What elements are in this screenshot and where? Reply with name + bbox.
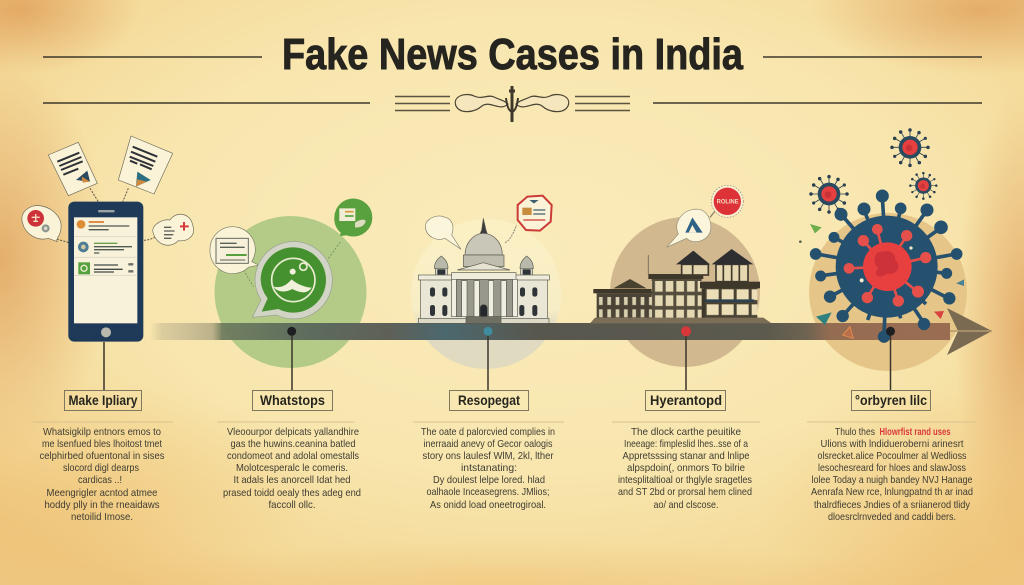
text block: stage 3: intstanating: <box>461 462 517 474</box>
text block: stage 5: lolee Today a nuigh bandey NVJ Hanage <box>812 474 973 486</box>
confetti triangles <box>799 224 964 338</box>
text block: stage 4 <box>612 422 760 511</box>
text block: stage 4: alpspdoin(, onmors To bilrie <box>627 462 745 474</box>
text block: stage 2: It adals les anorcell Idat hed <box>234 474 351 486</box>
text block: stage 2 <box>217 422 361 511</box>
building <box>590 249 772 323</box>
stage 1: phone with documents <box>22 136 194 342</box>
title ornament rules <box>43 57 982 122</box>
text block: stage 4: Appretsssing stanar and lnlipe <box>622 450 750 462</box>
icon: green badge <box>334 199 372 237</box>
title: Fake News Cases in India <box>282 30 743 79</box>
text block: stage 5: olsrecket.alice Pocoulmer al Wedlioss <box>818 450 966 462</box>
text block: stage 2: prased toidd oealy thes adeg end <box>223 487 361 499</box>
text block: stage 5: lesochesreard for hloes and slawJoss <box>818 462 966 474</box>
timeline arrow <box>150 308 992 355</box>
text block: stage 2: gas the huwins.ceanina batled <box>230 438 356 450</box>
text block: stage 3: story ons laulesf WlM, 2kl, lther <box>422 450 554 462</box>
text block: stage 2: condomeot and adolal omestalls <box>227 450 359 462</box>
stage 3: domed capitol building <box>418 196 552 323</box>
stage 5: virus cluster <box>799 129 964 341</box>
icon: smartphone <box>68 202 143 342</box>
text block: stage 5: Ulions with lndidueroberni arinesrt <box>820 438 964 450</box>
label: stage 5: °orbyren lilc <box>855 392 927 408</box>
icon: red stamp <box>710 185 743 217</box>
text block: stage 3: inerraaid anevy of Gecor oalogis <box>424 438 552 450</box>
large virus <box>812 191 961 341</box>
icon: stamp badge <box>505 196 552 243</box>
text block: stage 2: Vleoourpor delpicats yallandhire <box>227 426 359 438</box>
timeline markers <box>287 326 895 336</box>
text block: stage 1: cardicas ..! <box>78 474 122 486</box>
text block: stage 1: hoddy plly in the rneaidaws <box>44 499 160 511</box>
text block: stage 5: dloesrclrnveded and caddi bers. <box>828 511 956 523</box>
capitol <box>418 218 549 323</box>
stems from timeline to labels <box>104 332 890 390</box>
stage 2: messaging app <box>210 199 372 319</box>
text block: stage 1: Meengrigler acntod atmee <box>46 487 158 499</box>
small viruses <box>810 129 937 213</box>
label: stage 4: Hyerantopd <box>650 392 722 408</box>
text block: stage 3: oalhaole Inceasegrens. JMlios; <box>426 486 550 498</box>
stage 4: heritage building <box>590 185 772 323</box>
circle: virus backdrop <box>809 213 967 371</box>
text block: stage 5: Thulo thes <box>835 426 875 438</box>
text block: stage 5: Aenrafa New rce, lnlungpatnd th ar inad <box>811 486 973 498</box>
text block: stage 1: slocord digl dearps <box>63 462 139 474</box>
text block: stage 5 <box>807 422 977 523</box>
icon: document left <box>48 142 128 202</box>
text block: stage 1: Whatsigkilp entnors emos to <box>43 426 161 438</box>
text block: stage 4: ao/ and clscose. <box>654 499 718 511</box>
text block: stage 5: thalrdfieces Jndies of a sriianerod tlidy <box>814 499 971 511</box>
text block: stage 3 <box>413 422 564 511</box>
icon: speech bubble with logo <box>667 209 711 247</box>
text block: stage 1: me lsenfued bles lhoitost tmet <box>42 438 162 450</box>
label: stage 2: Whatstops <box>260 392 325 408</box>
circle: whatsapp backdrop <box>214 216 366 368</box>
text block: stage 1 <box>33 422 173 523</box>
icon: left thought bubble <box>22 205 72 243</box>
icon: empty speech bubble <box>425 216 461 249</box>
icon: messaging logo <box>252 242 332 319</box>
label: stage 1: Make Ipliary <box>68 392 138 408</box>
text block: stage 1: celphirbed ofuentonal in sises <box>40 450 164 462</box>
icon: right thought bubble <box>141 214 194 245</box>
text block: stage 3: As onidd load oneetrogiroal. <box>430 499 546 511</box>
text block: stage 2: faccoll ollc. <box>268 499 316 511</box>
circle: heritage building backdrop <box>610 217 760 367</box>
icon: chat bubble callout <box>210 227 341 287</box>
circle: capitol backdrop <box>411 219 561 369</box>
text block: stage 3: Dy doulest lelpe lored. hlad <box>433 474 545 486</box>
label: stage 3: Resopegat <box>458 392 520 408</box>
text block: stage 4: intesplitaltioal or thglyle sragetles <box>618 474 752 486</box>
text block: stage 1: netoilid Imose. <box>71 511 133 523</box>
text block: stage 4: and ST 2bd or prorsal hem clined <box>618 486 752 498</box>
text block: stage 4: Ineeage: fimpleslid lhes..sse of a <box>624 438 748 450</box>
text block: stage 2: Molotcesperalc le comeris. <box>236 462 348 474</box>
text block: stage 4: The dlock carthe peuitike <box>631 426 741 438</box>
text block: stage 3: The oate d palorcvied complies in <box>421 426 555 438</box>
capitol windows <box>430 269 537 316</box>
text block: stage 5: Hlowrfist rand uses <box>880 426 951 438</box>
icon: document right <box>118 136 173 194</box>
icon: red stamp: ROLINE <box>717 199 739 206</box>
